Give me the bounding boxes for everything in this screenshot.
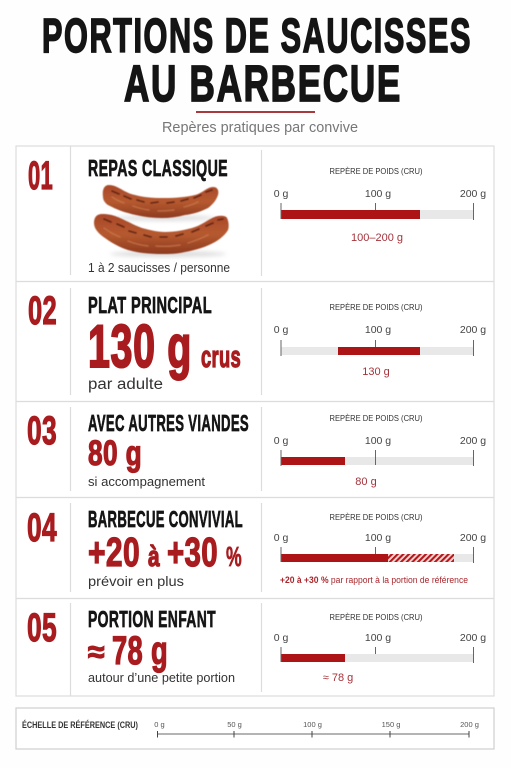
scale axis: 100 g [303,720,322,729]
chart: row 02 weight gauge: 200 g [460,324,486,336]
number 04: 04 [27,506,57,550]
subtitle: Repères pratiques par convive [162,120,358,136]
scale axis: 0 g [154,720,165,729]
big value +20 a +30 %: +20 [88,529,140,575]
chart: row 05 weight gauge [274,613,486,684]
big value 130 g crus: 130 g [88,313,192,380]
panel: reference scale [16,708,494,749]
heading repas classique: REPAS CLASSIQUE [88,155,228,181]
scale label: ÉCHELLE DE RÉFÉRENCE (CRU) [22,720,138,730]
chart: row 01 weight gauge: REPÈRE DE POIDS (CRU) [330,167,423,176]
chart: row 04 weight gauge: 200 g [460,532,486,544]
chart: row 03 weight gauge: 0 g [274,435,288,447]
scale axis: 150 g [382,720,400,729]
chart: row 03 weight gauge: REPÈRE DE POIDS (CRU) [330,414,423,423]
chart: row 03 weight gauge: 80 g [355,476,377,488]
number 03: 03 [27,409,57,453]
big value +20 a +30 %: +30 [167,529,218,575]
chart: row 03 weight gauge [274,414,486,488]
scale axis: 200 g [460,720,479,729]
chart: row 02 weight gauge: REPÈRE DE POIDS (CRU) [330,303,423,312]
panel: row 03 avec autres viandes [27,409,249,489]
table frame [16,146,494,696]
chart: row 04 weight gauge: 100 g [365,532,391,544]
chart: row 05 weight gauge: 0 g [274,632,288,644]
chart: row 01 weight gauge [274,167,486,244]
chart: row 01 weight gauge: 200 g [460,188,486,200]
big value +20 a +30 %: % [226,541,242,572]
big value approx 78 g [88,629,168,673]
heading avec autres viandes: AVEC AUTRES VIANDES [88,410,249,436]
big value approx 78 g: ≈ [88,636,105,669]
scale axis: 50 g [227,720,242,729]
chart: row 04 weight gauge [274,513,486,585]
title [42,9,472,112]
heading portion enfant: PORTION ENFANT [88,606,216,632]
big value +20 a +30 % [88,529,242,575]
panel: row 01 repas classique [28,154,230,275]
chart: row 03 weight gauge: 200 g [460,435,486,447]
caption: autour d’une petite portion [88,671,235,685]
chart: row 05 weight gauge: ≈ 78 g [323,672,353,684]
heading barbecue convivial: BARBECUE CONVIVIAL [88,506,243,532]
chart: row 02 weight gauge: 130 g [362,366,390,378]
panel: row 02 plat principal [28,289,241,393]
caption: 1 à 2 saucisses / personne [88,261,230,275]
chart: row 04 weight gauge: 0 g [274,532,288,544]
panel: row 05 portion enfant [27,606,235,685]
chart: row 01 weight gauge: 0 g [274,188,288,200]
chart: row 02 weight gauge: 100 g [365,324,391,336]
caption: par adulte [88,376,163,393]
scale axis [154,720,479,738]
big value 80 g: 80 g [88,434,142,473]
chart: row 05 weight gauge: 100 g [365,632,391,644]
chart: row 01 weight gauge: 100 g [365,188,391,200]
panel: row 04 barbecue convivial [27,506,243,589]
chart: row 04 weight gauge: REPÈRE DE POIDS (CRU) [330,513,423,522]
icon: two grilled sausages [94,185,229,257]
chart: row 02 weight gauge: 0 g [274,324,288,336]
big value 130 g crus: crus [201,339,241,374]
chart: row 01 weight gauge: 100–200 g [351,232,403,244]
chart: row 05 weight gauge: 200 g [460,632,486,644]
heading plat principal: PLAT PRINCIPAL [88,292,212,318]
number 05: 05 [27,606,57,650]
big value approx 78 g: 78 g [112,629,168,673]
chart: row 03 weight gauge: 100 g [365,435,391,447]
chart: row 04 weight gauge: +20 à +30 % par rapport à la portion de référence [280,575,468,585]
caption: si accompagnement [88,475,206,489]
chart: row 05 weight gauge: REPÈRE DE POIDS (CRU) [330,613,423,622]
caption: prévoir en plus [88,573,184,589]
big value +20 a +30 %: à [148,541,160,573]
chart: row 02 weight gauge [274,303,486,378]
number 02: 02 [28,289,57,333]
title underline [196,111,315,113]
number 01: 01 [28,154,53,198]
